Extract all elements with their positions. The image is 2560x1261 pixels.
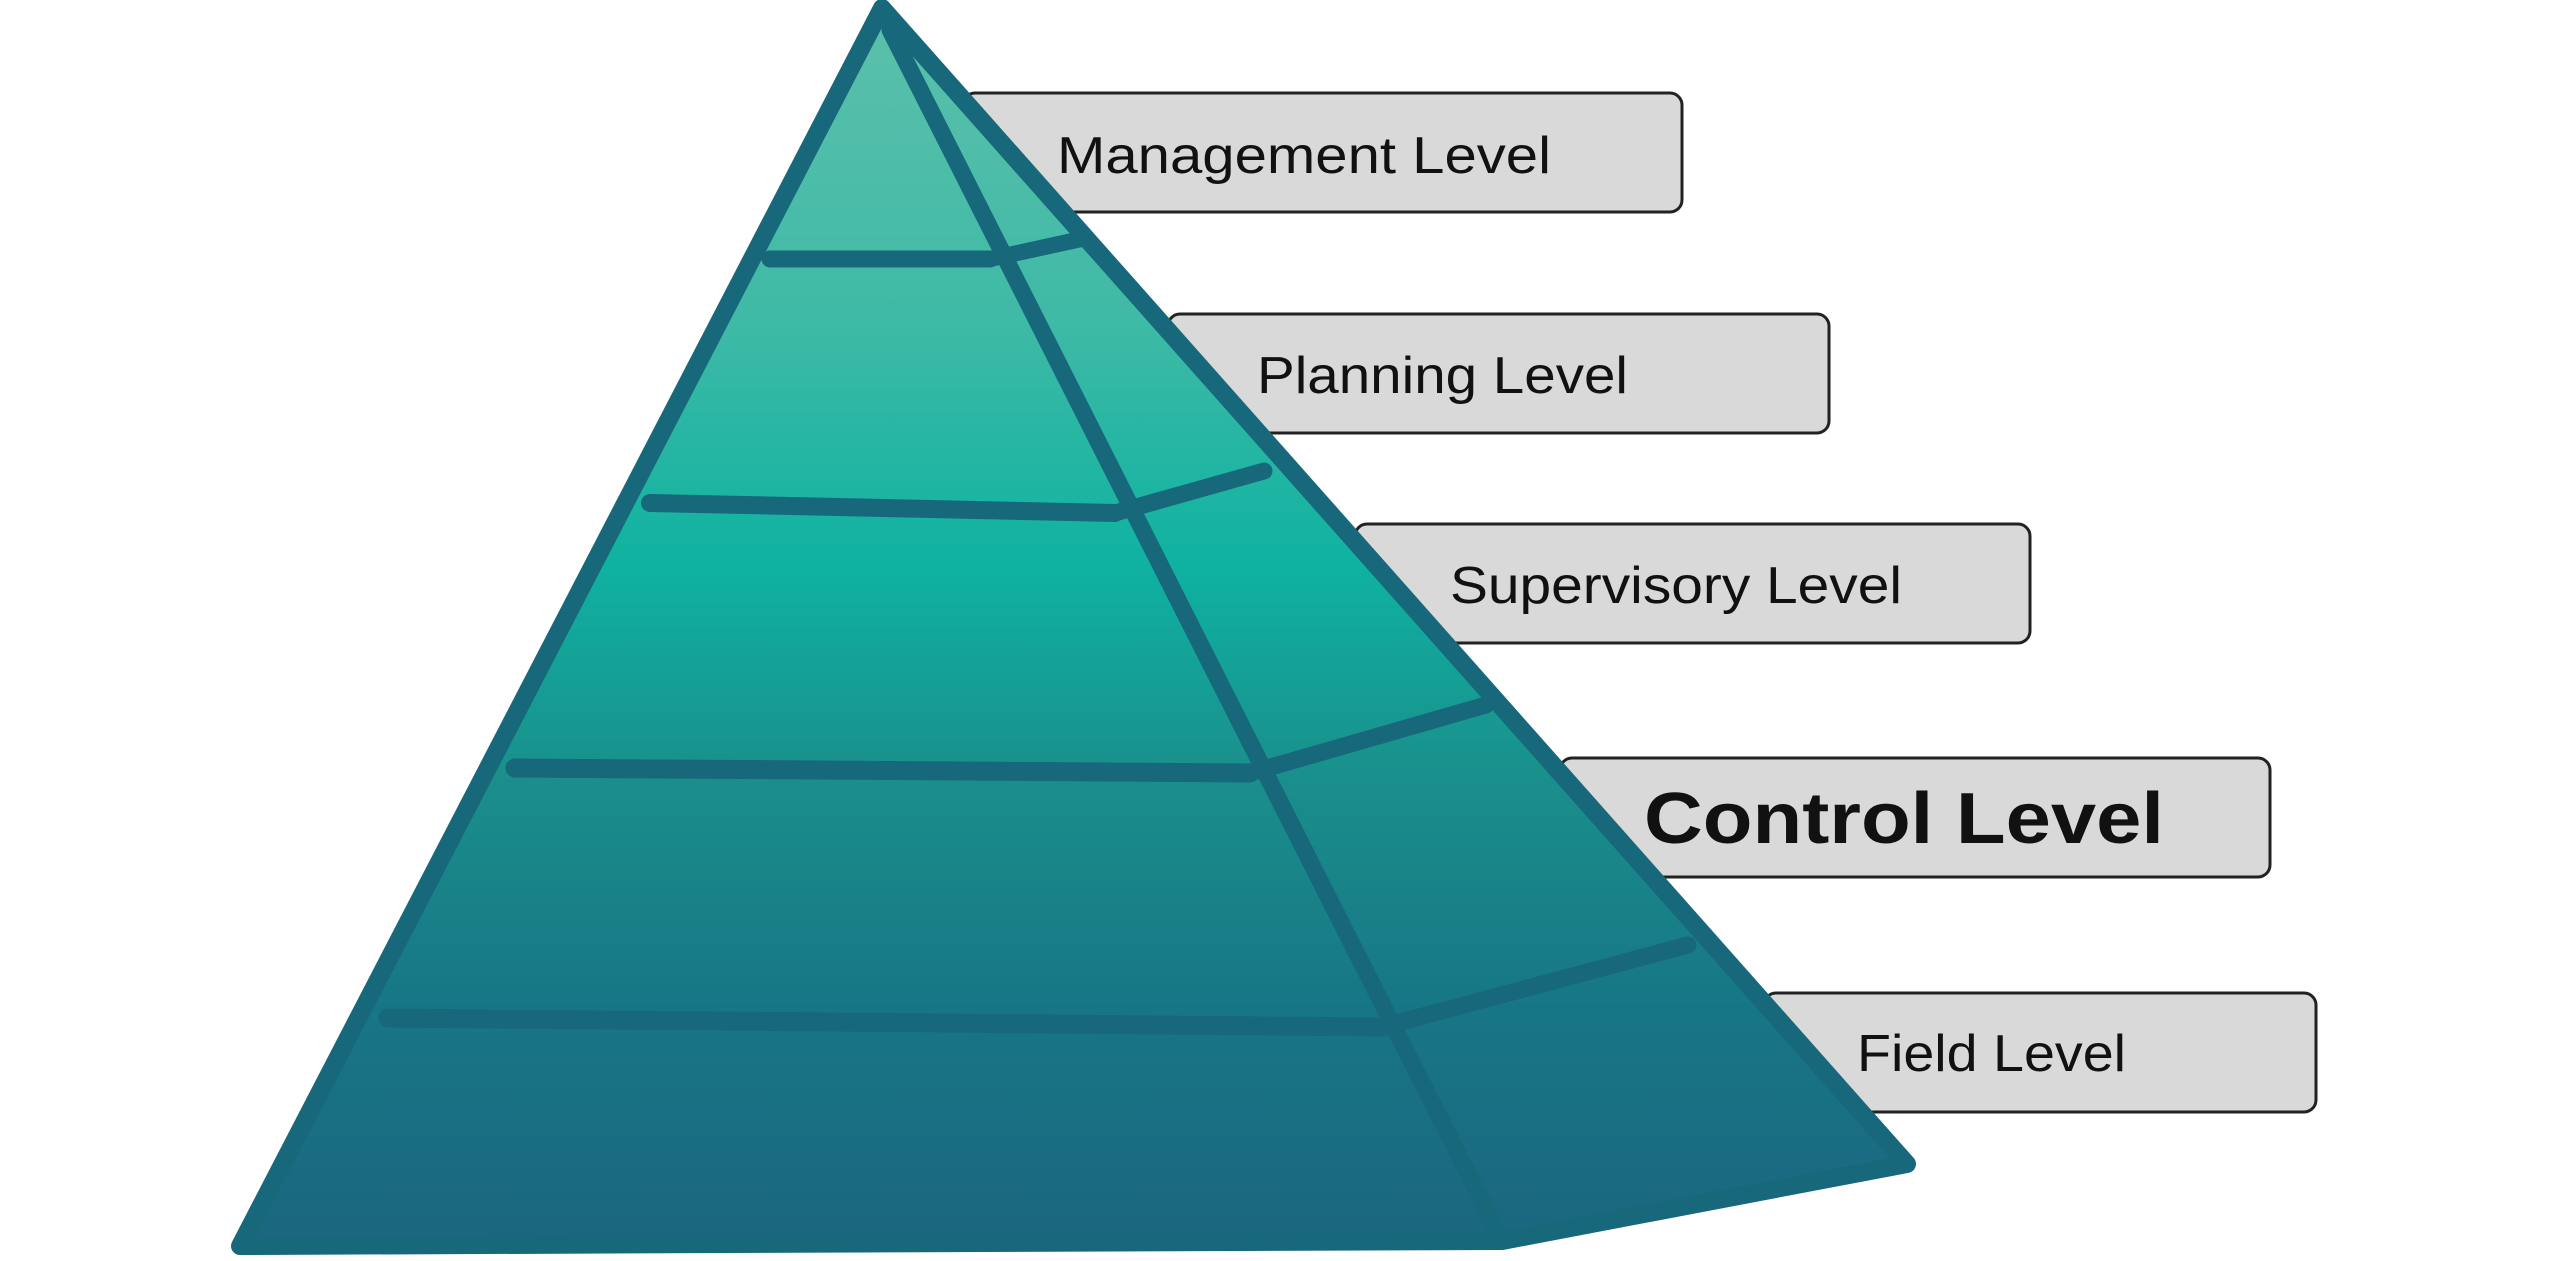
label: Supervisory Level <box>1355 524 2030 643</box>
label: Field Level <box>1764 993 2316 1112</box>
label: Control Level <box>1560 758 2270 877</box>
pyramid: right face <box>882 8 1907 1241</box>
pyramid: left face <box>240 8 1502 1246</box>
label: Control Level: Control Level <box>1644 779 2164 859</box>
label: Management Level: Management Level <box>1057 127 1551 185</box>
label: Field Level: Field Level <box>1857 1025 2126 1083</box>
pyramid <box>240 8 1907 1246</box>
label: Planning Level <box>1168 314 1829 433</box>
label: Supervisory Level: Supervisory Level <box>1450 557 1902 615</box>
label: Management Level <box>963 93 1682 212</box>
label: Planning Level: Planning Level <box>1257 347 1628 405</box>
